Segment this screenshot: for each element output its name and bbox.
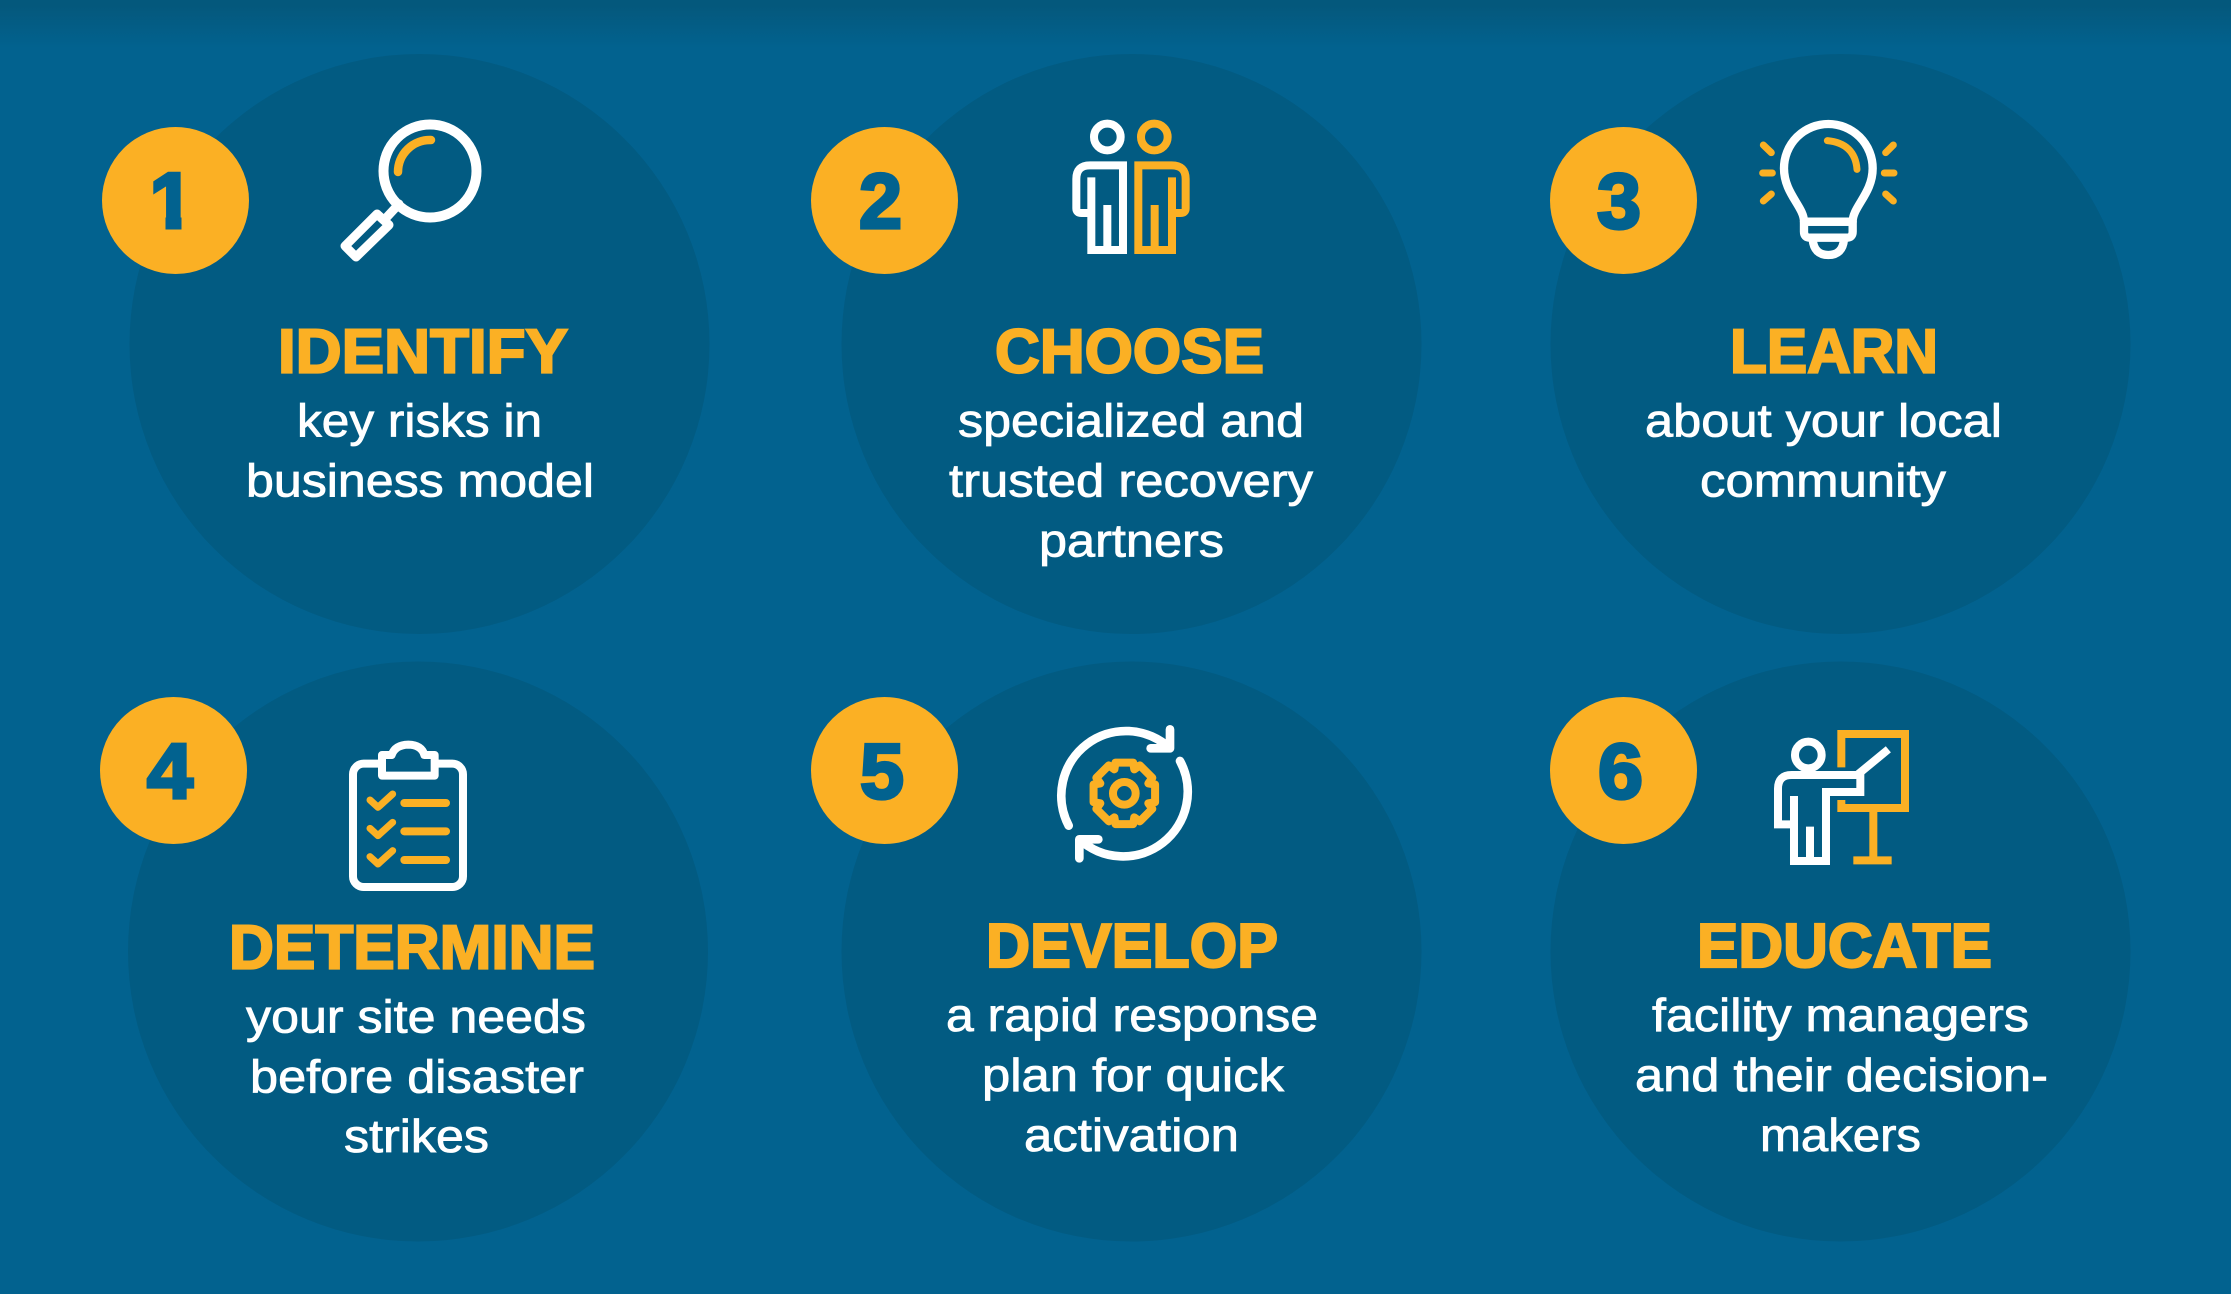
heading: educate: EDUCATE (1697, 912, 1992, 981)
number badge 5 (811, 697, 958, 844)
number badge 2 (811, 127, 958, 274)
icon: two people (1076, 124, 1186, 250)
number badge 3 (1550, 127, 1697, 274)
icon: presenter at board (1778, 734, 1905, 861)
heading: choose: CHOOSE (995, 318, 1264, 386)
description: develop: a rapid response (946, 989, 1318, 1041)
panel: step 1 identify (102, 54, 710, 634)
number badge 1 (102, 127, 249, 274)
number badge 1: 1 (150, 156, 193, 244)
description: develop: activation (1024, 1109, 1239, 1161)
description: identify: key risks in (297, 394, 542, 446)
number badge 6: 6 (1598, 727, 1643, 815)
number badge 3: 3 (1597, 157, 1641, 245)
description: choose: partners (1039, 514, 1224, 566)
description: identify (246, 394, 594, 506)
icon: light bulb (1763, 124, 1894, 255)
description: develop (946, 989, 1318, 1161)
description: educate (1635, 989, 2048, 1161)
number badge 4 (100, 697, 247, 844)
panel: step 5 develop (811, 662, 1422, 1242)
heading: determine: DETERMINE (229, 914, 595, 982)
number badge 4: 4 (147, 727, 193, 815)
panel: step 3 learn (1550, 54, 2130, 634)
icon: gear with cycle arrows (1061, 729, 1188, 858)
description: choose (949, 394, 1313, 566)
description: educate: facility managers (1652, 989, 2029, 1041)
description: educate: makers (1760, 1109, 1921, 1161)
description: choose: trusted recovery (949, 454, 1313, 506)
heading: identify: IDENTIFY (278, 318, 568, 386)
panel: step 4 determine (100, 662, 708, 1242)
description: determine: strikes (344, 1110, 489, 1162)
number badge 2: 2 (859, 157, 902, 245)
description: determine (246, 990, 586, 1162)
description: learn (1645, 394, 2002, 506)
panel: step 6 educate (1550, 662, 2130, 1242)
heading: develop: DEVELOP (986, 912, 1278, 981)
description: develop: plan for quick (982, 1049, 1285, 1101)
description: determine: your site needs (246, 990, 586, 1042)
heading: learn: LEARN (1730, 318, 1938, 386)
panel: step 2 choose (811, 54, 1422, 634)
number badge 5: 5 (860, 727, 904, 815)
description: determine: before disaster (250, 1050, 584, 1102)
description: learn: community (1700, 454, 1946, 506)
icon: magnifying glass (345, 124, 476, 257)
number badge 6 (1550, 697, 1697, 844)
description: identify: business model (246, 454, 594, 506)
description: choose: specialized and (958, 394, 1304, 446)
description: educate: and their decision- (1635, 1049, 2048, 1101)
description: learn: about your local (1645, 394, 2002, 446)
icon: clipboard checklist (353, 745, 463, 887)
